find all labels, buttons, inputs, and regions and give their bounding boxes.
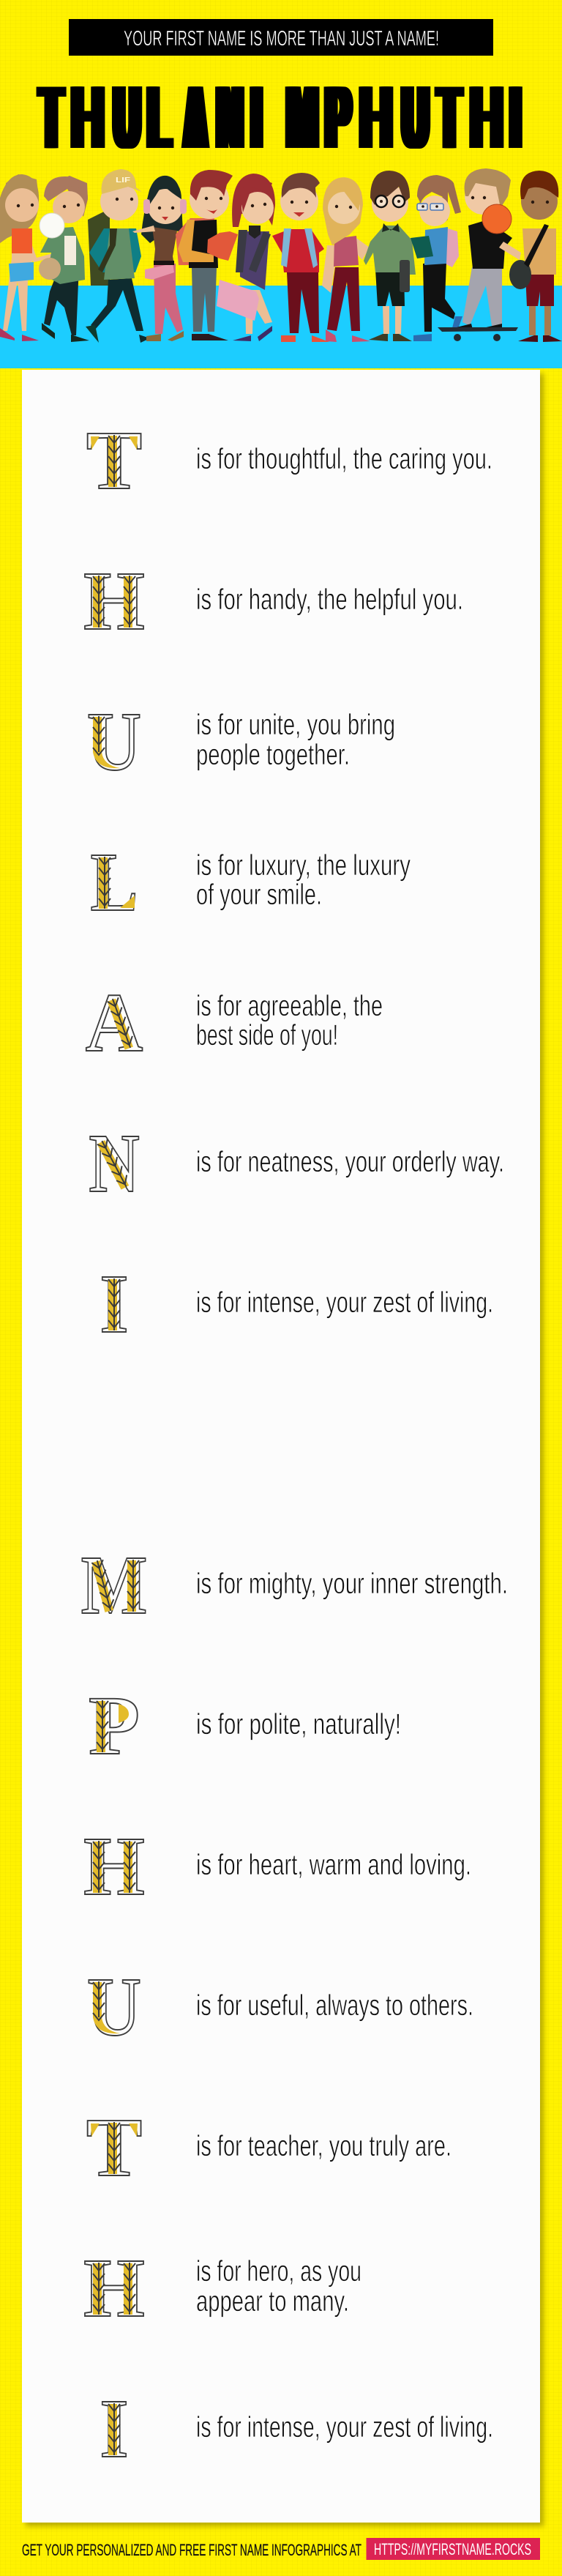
name title: M [287, 67, 318, 167]
letter P: P [89, 1679, 140, 1772]
text: hero [196, 2255, 361, 2318]
letter U: U [87, 695, 141, 788]
name title [37, 67, 522, 167]
person 12: boy with black shoulder bag [509, 171, 562, 342]
name title: H [359, 67, 392, 167]
row: I [100, 1258, 493, 1350]
letter H: H [83, 1820, 145, 1913]
name title: N [217, 67, 242, 167]
illustration: group of fourteen students [0, 168, 562, 343]
text: agreeable [196, 990, 383, 1051]
name title: I [509, 67, 522, 167]
row: U [87, 695, 395, 788]
name title: P [326, 67, 351, 167]
row: M [81, 1538, 508, 1631]
row: H [83, 2242, 361, 2335]
letter H: H [83, 555, 145, 648]
letter I: I [100, 1258, 129, 1350]
letter M: M [81, 1538, 147, 1631]
text: teacher: is for teacher, you truly are. [196, 2130, 452, 2162]
row: A [86, 976, 383, 1070]
letter U: U [87, 1960, 141, 2053]
blue floor band [0, 286, 562, 368]
name title: T [438, 67, 460, 167]
row: T [86, 2101, 452, 2194]
text: agreeable: is for agreeable, the [196, 990, 383, 1022]
text: agreeable: best side of you! [196, 1019, 338, 1051]
letter T: T [86, 414, 142, 507]
letter N: N [89, 1117, 140, 1210]
person 6: girl with pink bag [217, 174, 275, 341]
person 9: boy with glasses [364, 171, 416, 341]
person 7: boy in red shirt [272, 173, 329, 342]
row: H [83, 555, 463, 648]
name title: L [148, 67, 171, 167]
text: heart: is for heart, warm and loving. [196, 1849, 471, 1881]
row: L [91, 835, 411, 928]
letter L: L [91, 835, 138, 928]
person 2: girl with volleyball [39, 176, 89, 342]
person 1: girl in orange top [0, 174, 56, 341]
text: luxury: is for luxury, the luxury [196, 849, 411, 882]
text: unite [196, 709, 395, 771]
row: U [87, 1960, 473, 2053]
name title: A [186, 67, 206, 167]
letter H: H [83, 2242, 145, 2335]
text: luxury: of your smile. [196, 879, 322, 911]
white content panel [22, 370, 540, 2523]
name title: U [402, 67, 428, 167]
row: N [89, 1117, 504, 1210]
footer [22, 2538, 540, 2560]
text: polite: is for polite, naturally! [196, 1708, 401, 1741]
row: H [83, 1820, 471, 1913]
tagline banner [69, 19, 493, 56]
text: handy: is for handy, the helpful you. [196, 584, 463, 616]
text: unite: is for unite, you bring [196, 709, 395, 741]
name title: H [71, 67, 104, 167]
person 11: skateboarder with basketball [438, 168, 521, 341]
name title: T [40, 67, 62, 167]
name title: H [470, 67, 503, 167]
row: I [100, 2383, 493, 2475]
person 3: boy with backpack and cap [86, 169, 150, 343]
text: luxury [196, 849, 411, 911]
text: hero: appear to many. [196, 2285, 349, 2318]
letter T: T [86, 2101, 142, 2194]
person 4: girl with pink headphones [132, 176, 187, 341]
person 3: boy with backpack and cap: LIF [116, 176, 130, 185]
row: P [89, 1679, 401, 1772]
letter I: I [100, 2383, 129, 2475]
letter A: A [86, 976, 143, 1070]
name title: I [250, 67, 263, 167]
text: unite: people together. [196, 739, 350, 771]
person 5: boy reading a book [176, 170, 238, 340]
person 8: blonde girl [322, 177, 370, 342]
person 10: girl with tablet [411, 175, 462, 341]
row: T [86, 414, 492, 507]
text: hero: is for hero, as you [196, 2255, 361, 2287]
name title: U [114, 67, 140, 167]
